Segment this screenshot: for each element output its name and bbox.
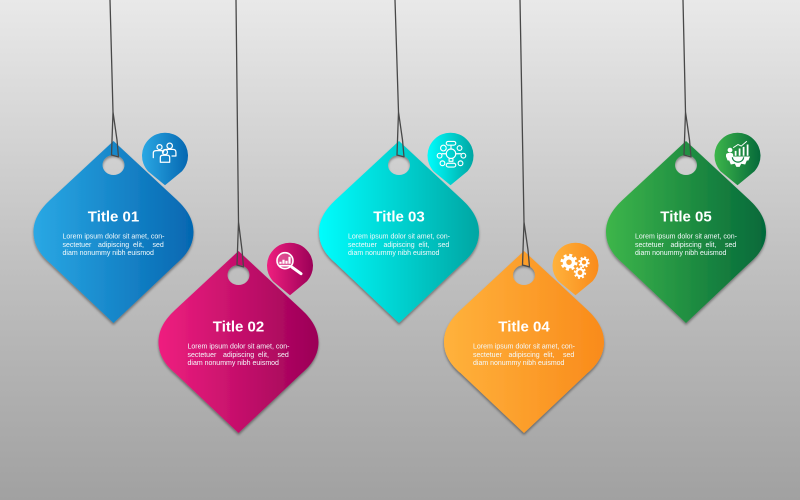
card 3: Title 03 — [319, 133, 479, 323]
pin badge — [267, 243, 313, 295]
heading: Title 02 — [213, 318, 264, 336]
pin badge — [714, 133, 760, 185]
card 2: Title 02 — [158, 243, 318, 433]
icon: magnifier with chart — [277, 253, 301, 274]
body text: sectetuer — [62, 242, 92, 249]
body text: elit, — [706, 242, 716, 249]
icon: gears — [562, 255, 589, 278]
body text: Lorem ipsum dolor sit amet, con- — [635, 234, 738, 240]
body text: sectetuer — [635, 242, 664, 249]
body text: elit, — [258, 352, 269, 359]
body text: sectetuer — [348, 242, 377, 249]
body text: adipiscing — [508, 352, 540, 359]
pin shape — [267, 243, 313, 295]
string 3 — [395, 0, 404, 157]
pin badge — [142, 133, 188, 185]
pin shape — [714, 133, 760, 185]
string 1 — [110, 0, 119, 157]
body text: sectetuer — [188, 352, 217, 359]
body text: Lorem ipsum dolor sit amet, con- — [473, 344, 576, 350]
body text: adipiscing — [670, 242, 702, 249]
body text: diam nonummy nibh euismod — [473, 360, 565, 367]
pin badge — [428, 133, 474, 185]
tag shape — [158, 251, 318, 433]
tag shape — [319, 141, 479, 323]
pin shape — [428, 133, 474, 185]
icon: idea network — [437, 141, 466, 167]
body text: sed — [152, 242, 164, 249]
body text: adipiscing — [223, 352, 254, 359]
body text: sed — [725, 242, 736, 249]
string 5 — [683, 0, 692, 157]
pin shape — [142, 133, 188, 185]
card 4: Title 04 — [444, 243, 604, 433]
body text: Lorem ipsum dolor sit amet, con- — [348, 234, 451, 240]
tag shape — [34, 141, 194, 323]
body text: sed — [438, 242, 449, 249]
body text: diam nonummy nibh euismod — [348, 250, 440, 257]
body text: elit, — [418, 242, 429, 249]
body text: Lorem ipsum dolor sit amet, con- — [62, 234, 165, 240]
card 5: Title 05 — [606, 133, 766, 323]
body text: diam nonummy nibh euismod — [62, 250, 154, 257]
heading: Title 03 — [373, 208, 425, 226]
card 1: Title 01 — [34, 133, 194, 323]
body text: adipiscing — [98, 242, 129, 249]
body text: diam nonummy nibh euismod — [188, 360, 279, 367]
body text: sectetuer — [473, 352, 502, 359]
icon: growth chart with gear — [726, 141, 750, 167]
body text: adipiscing — [384, 242, 415, 249]
body text: elit, — [544, 352, 554, 359]
tag shape — [606, 141, 766, 323]
string 4 — [520, 0, 530, 267]
body text: Lorem ipsum dolor sit amet, con- — [188, 344, 290, 350]
heading: Title 05 — [660, 208, 712, 226]
body text: sed — [278, 352, 289, 359]
icon: people — [153, 143, 176, 162]
heading: Title 01 — [88, 208, 139, 226]
body text: sed — [563, 352, 574, 359]
body text: elit, — [133, 242, 144, 249]
string 2 — [236, 0, 244, 267]
heading: Title 04 — [498, 318, 550, 336]
tag shape — [444, 251, 604, 433]
body text: diam nonummy nibh euismod — [635, 250, 727, 257]
pin shape — [552, 243, 598, 295]
pin badge — [552, 243, 598, 295]
